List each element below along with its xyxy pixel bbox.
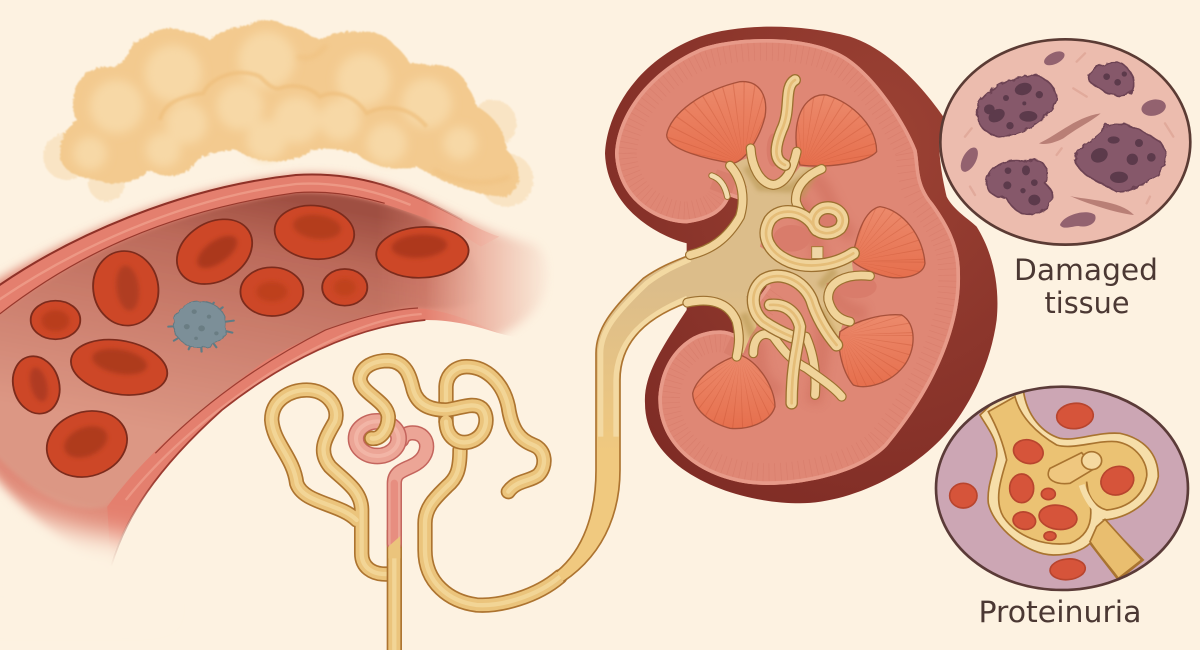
tubule: collecting duct and long tube	[272, 390, 560, 650]
strands	[1039, 113, 1134, 215]
cortex	[615, 39, 960, 485]
panel: damaged tissue	[940, 39, 1190, 245]
background inside the vessel curve	[109, 320, 629, 603]
red cells	[950, 402, 1138, 581]
cell voids	[984, 71, 1156, 205]
lower-left fade	[0, 490, 155, 610]
faint fibres	[965, 53, 1173, 203]
small deposits	[957, 49, 1167, 228]
capsule	[605, 27, 997, 503]
lower tubule	[1090, 519, 1142, 578]
cloud of fatty deposits	[43, 20, 533, 207]
red blood cells	[7, 201, 471, 489]
heading: Damaged: Damaged	[1014, 253, 1158, 287]
tubule: convoluted loops	[360, 361, 544, 492]
loop of Henle, pink segment	[356, 421, 427, 558]
vessel tissue layers	[0, 174, 551, 573]
blood vessel	[0, 168, 545, 562]
panel: proteinuria	[936, 387, 1188, 590]
vessel outlines	[0, 174, 462, 567]
heading: tissue: tissue	[1044, 286, 1130, 320]
ureter cream rims	[557, 255, 690, 582]
calyx tubules	[687, 80, 870, 403]
renal pelvis and ureter	[557, 158, 853, 582]
capsule inner cavity	[988, 397, 1147, 544]
nephron	[272, 361, 560, 650]
renal pyramids	[667, 82, 925, 429]
immune cell	[168, 301, 234, 352]
pink tissue inside the tube loops	[767, 133, 877, 298]
damaged clusters	[977, 62, 1165, 214]
kidney	[557, 27, 997, 582]
protein plug	[1048, 452, 1102, 484]
capsule outer layer	[980, 387, 1158, 580]
heading: Proteinuria: Proteinuria	[978, 595, 1142, 629]
